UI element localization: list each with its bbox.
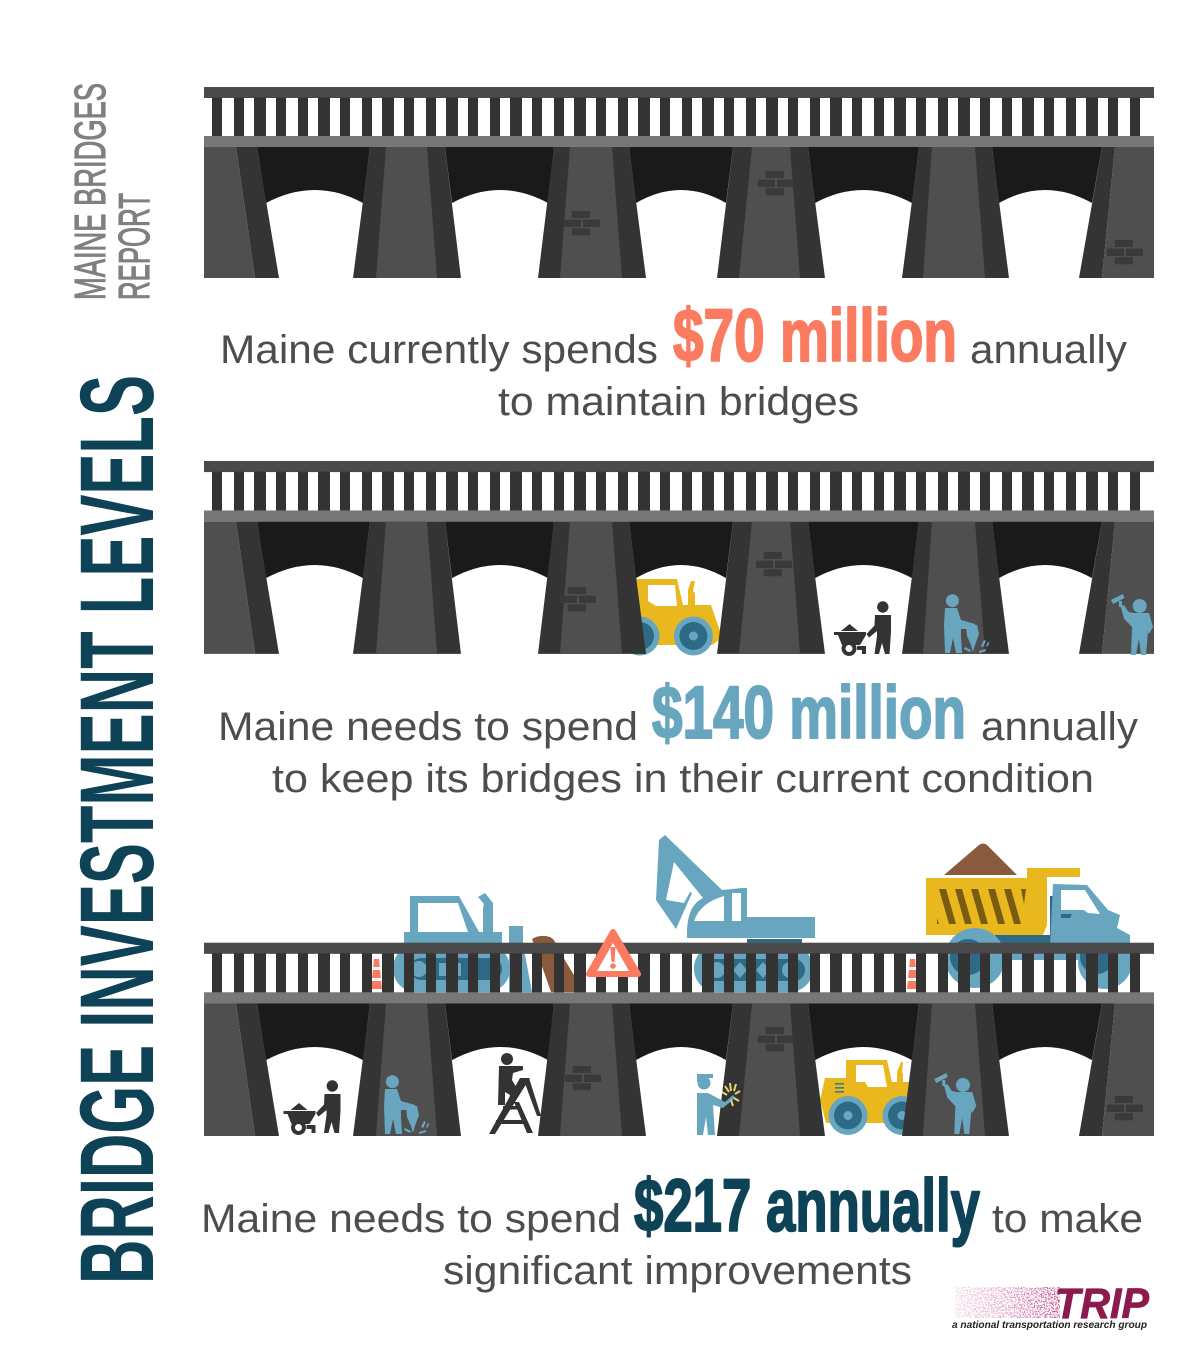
icon: bricks <box>758 171 794 195</box>
text block: $70 million <box>220 294 1127 424</box>
text block: $140 million <box>218 671 1138 801</box>
amount: $70 million: $70 million <box>673 294 957 377</box>
amount: $140 million: $140 million <box>652 671 966 754</box>
icon: dirt pile <box>532 936 576 992</box>
bridge structure <box>204 87 1154 278</box>
icon: bricks <box>1107 240 1143 264</box>
text block: $140 million: Maine needs to spend <box>218 705 638 749</box>
icon: bricks <box>565 1066 601 1090</box>
text block: $70 million: Maine currently spends <box>220 328 658 372</box>
report title <box>66 83 159 300</box>
icon: yellow tractor <box>620 579 720 656</box>
icon: bulldozer <box>393 893 532 992</box>
logo tagline: a national transportation research group <box>952 1320 1147 1331</box>
icon: worker with jackhammer <box>384 1075 430 1134</box>
icon: yellow tractor <box>820 1060 922 1135</box>
bridge structure <box>204 461 1154 654</box>
text block: $217 annually: significant improvements <box>443 1249 912 1293</box>
icon: excavator <box>656 835 815 992</box>
icon: worker with wheelbarrow <box>284 1080 340 1135</box>
icon: worker with paint roller <box>1111 594 1153 655</box>
icon: bricks <box>564 211 600 235</box>
icon: bricks <box>756 552 792 576</box>
logo: TRIP <box>952 1280 1149 1331</box>
text block: $140 million: to keep its bridges in their current condition <box>272 757 1094 801</box>
panel: needed to maintain bridge <box>204 461 1154 656</box>
icon: worker on ladder <box>489 1053 541 1134</box>
text block: $217 annually: to make <box>992 1197 1143 1241</box>
icon: bricks <box>758 1027 794 1051</box>
panel: current spending bridge <box>204 87 1154 278</box>
icon: worker with paint roller <box>934 1073 976 1134</box>
text block: $217 annually: Maine needs to spend <box>201 1197 621 1241</box>
panel: road construction on top of bridge <box>204 835 1154 1136</box>
icon: bricks <box>1107 1096 1143 1120</box>
text block: $70 million: to maintain bridges <box>498 380 859 424</box>
icon: bricks <box>560 587 596 611</box>
text block: $217 annually <box>201 1164 1143 1293</box>
icon: traffic cone <box>907 959 918 989</box>
icon: dump truck <box>926 844 1132 989</box>
text block: $70 million: annually <box>970 328 1127 372</box>
heading: Report: REPORT <box>110 193 159 300</box>
icon: warning sign <box>589 932 638 974</box>
icon: welder <box>697 1074 740 1135</box>
logo wordmark: TRIP <box>1055 1280 1149 1328</box>
bridge structure <box>204 943 1154 1136</box>
amount: $217 annually: $217 annually <box>634 1164 980 1247</box>
icon: worker with wheelbarrow <box>834 601 891 656</box>
icon: traffic cone <box>371 959 382 989</box>
text block: $140 million: annually <box>981 705 1138 749</box>
icon: worker with jackhammer <box>944 594 990 653</box>
